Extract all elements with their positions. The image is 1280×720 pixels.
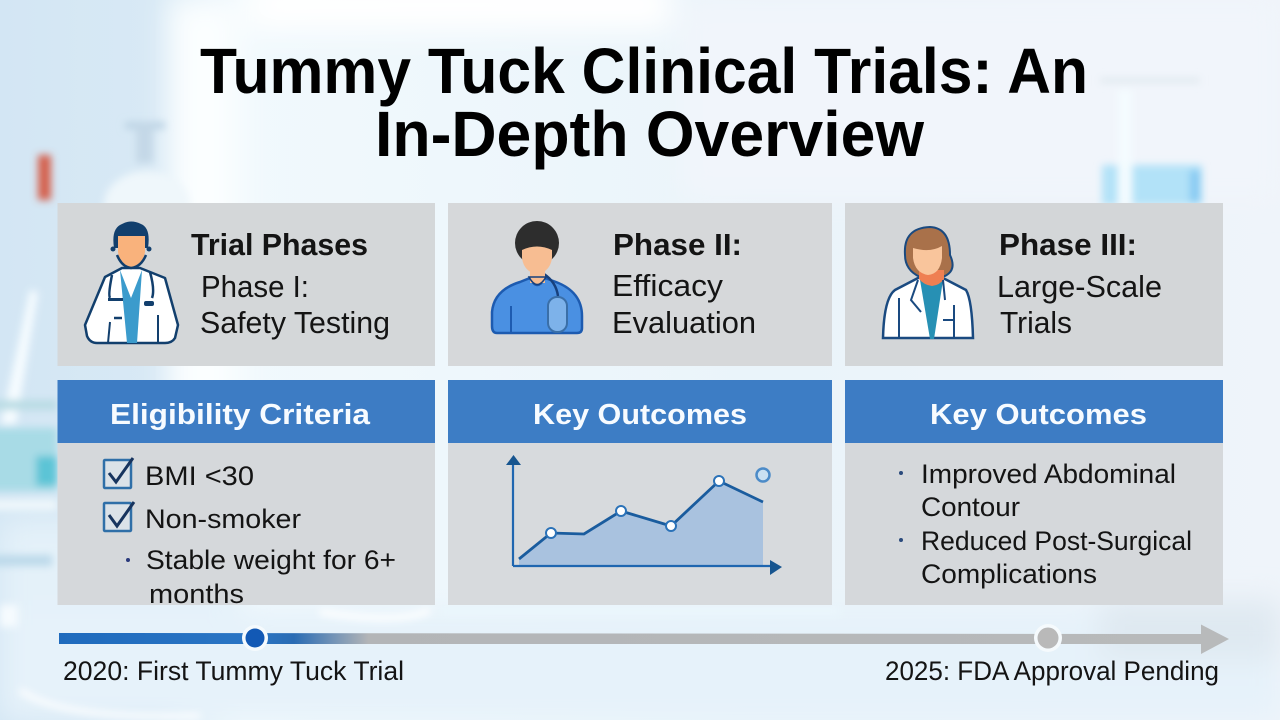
phase II text: Phase II: bbox=[613, 227, 742, 262]
phase III text: Large-Scale bbox=[997, 269, 1162, 304]
heading: key outcomes: Key Outcomes bbox=[533, 399, 747, 431]
bullet bbox=[126, 558, 130, 562]
timeline bbox=[59, 624, 1229, 686]
marker: 2020 bbox=[242, 625, 268, 651]
phase I text: Safety Testing bbox=[200, 305, 390, 340]
criterion: stable weight bbox=[146, 545, 396, 609]
criterion: stable weight: Stable weight for 6+ bbox=[146, 545, 396, 575]
phase II text: Evaluation bbox=[612, 305, 756, 340]
panel: key outcomes list bbox=[845, 380, 1223, 605]
panel: phase III bbox=[845, 203, 1223, 366]
label: 2025: 2025: FDA Approval Pending bbox=[885, 656, 1219, 686]
checkbox: non-smoker bbox=[104, 502, 134, 531]
phase III text: Trials bbox=[1000, 305, 1072, 340]
phase I text bbox=[191, 227, 390, 340]
icon: female doctor bbox=[883, 227, 973, 339]
criterion: BMI: BMI <30 bbox=[145, 461, 254, 491]
phase II text: Efficacy bbox=[612, 268, 723, 303]
outcome: fewer complications: Complications bbox=[921, 559, 1097, 589]
bullet bbox=[899, 538, 903, 542]
title: In-Depth Overview bbox=[375, 98, 924, 170]
label: 2020: 2020: First Tummy Tuck Trial bbox=[63, 656, 404, 686]
outcome: abdominal contour: Improved Abdominal bbox=[921, 459, 1176, 489]
panel: trial phases, phase I bbox=[58, 203, 435, 366]
bullet bbox=[899, 471, 903, 475]
panel: phase II bbox=[448, 203, 832, 366]
outcome: abdominal contour bbox=[921, 459, 1176, 522]
timeline arrow bbox=[59, 624, 1229, 654]
criterion: stable weight: months bbox=[149, 579, 244, 609]
panel: eligibility criteria bbox=[58, 380, 435, 609]
phase III text bbox=[997, 227, 1162, 340]
phase I text: Phase I: bbox=[201, 269, 309, 304]
icon: doctor with white coat bbox=[85, 222, 178, 343]
phase II text bbox=[612, 227, 756, 340]
outcome: fewer complications bbox=[921, 526, 1192, 589]
criterion: non-smoker: Non-smoker bbox=[145, 504, 301, 534]
checkbox: BMI bbox=[104, 458, 133, 488]
marker: 2025 bbox=[1034, 624, 1062, 652]
panel: key outcomes chart bbox=[448, 380, 832, 605]
title bbox=[200, 35, 1088, 170]
outcome: fewer complications: Reduced Post-Surgical bbox=[921, 526, 1192, 556]
phase I text: Trial Phases bbox=[191, 227, 368, 262]
line chart bbox=[506, 455, 782, 575]
title: Tummy Tuck Clinical Trials: An bbox=[200, 35, 1088, 107]
icon: clinician in blue scrubs bbox=[492, 221, 582, 333]
heading: eligibility criteria: Eligibility Criteria bbox=[110, 399, 371, 431]
phase III text: Phase III: bbox=[999, 227, 1137, 262]
outcome: abdominal contour: Contour bbox=[921, 492, 1020, 522]
heading: key outcomes: Key Outcomes bbox=[930, 399, 1147, 431]
